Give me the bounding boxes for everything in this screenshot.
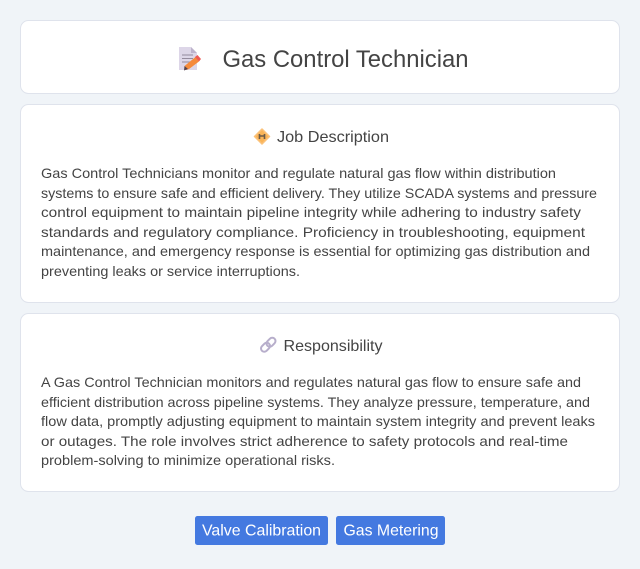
text: job description body: systems to ensure safe and efficient delivery. They utilize SCADA systems and pressure [41, 185, 597, 201]
text: job description body: preventing leaks or service interruptions. [41, 263, 300, 279]
title: Gas Control Technician [222, 46, 468, 73]
tag: valve calibration: Valve Calibration [202, 522, 321, 540]
text: responsibility body: or outages. The role involves strict adherence to safety protocols and real-time [41, 433, 568, 449]
panel: title header [20, 20, 620, 94]
text: responsibility body: A Gas Control Technician monitors and regulates natural gas flow to ensure safe and [41, 374, 581, 390]
tag: valve calibration [195, 516, 328, 545]
text: responsibility body: flow data, promptly adjusting equipment to maintain system integrity and prevent leaks [41, 413, 595, 429]
text: job description body: Gas Control Technicians monitor and regulate natural gas flow within distribution [41, 165, 556, 181]
heading: responsibility: Responsibility [284, 338, 382, 355]
text: responsibility body: problem-solving to minimize operational risks. [41, 452, 335, 468]
icon: chain link [260, 336, 277, 353]
icon: document with pencil [179, 47, 201, 70]
text: job description body [41, 165, 597, 279]
tag: gas metering: Gas Metering [344, 522, 438, 540]
icon: warning diamond [254, 129, 270, 144]
tag: gas metering [336, 516, 445, 545]
text: job description body: control equipment to maintain pipeline integrity while adhering to industry safety [41, 204, 581, 220]
panel: job description [20, 104, 620, 302]
panel: responsibility [20, 314, 620, 492]
text: responsibility body [41, 374, 595, 468]
text: job description body: maintenance, and emergency response is essential for optimizing gas distribution and [41, 243, 590, 259]
text: job description body: standards and regulatory compliance. Proficiency in troubleshooting, equipment [41, 224, 585, 240]
text: responsibility body: efficient distribution across pipeline systems. They analyze pressure, temperature, and [41, 394, 590, 410]
heading: job description: Job Description [277, 129, 389, 146]
